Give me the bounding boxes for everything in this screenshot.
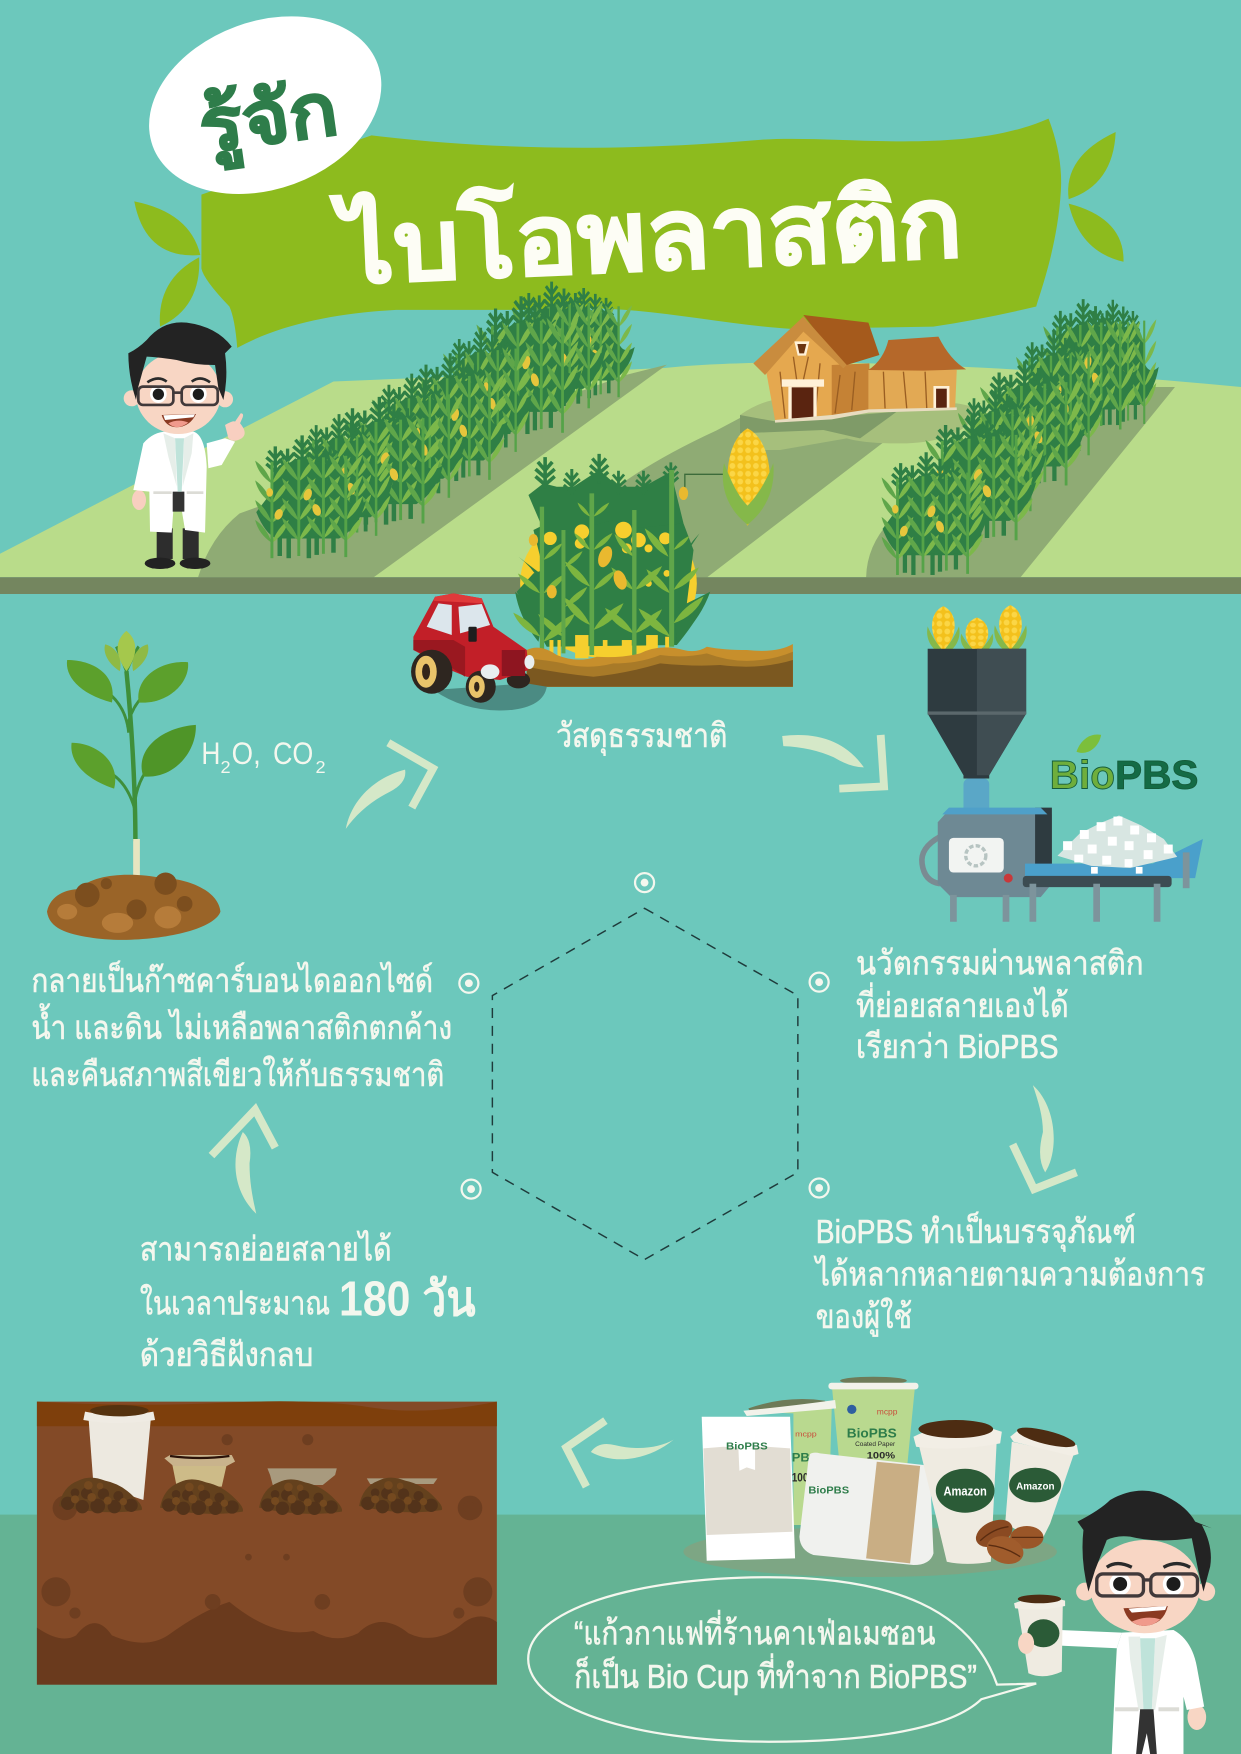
green cup behind bag: mcpp (795, 1430, 817, 1439)
machine (922, 605, 1203, 922)
quote text (574, 1609, 977, 1696)
text: 180 days (140, 1230, 476, 1374)
label: H2O, CO2: H (201, 736, 220, 771)
buried cup: fresh (83, 1405, 155, 1500)
text: innovation: นวัตกรรมผ่านพลาสติก (856, 945, 1144, 982)
front corn (513, 454, 710, 658)
scientist holding cup (1014, 1491, 1215, 1754)
text: end of cycle (31, 960, 452, 1094)
soil strip (527, 644, 793, 687)
text: end of cycle: กลายเป็นก๊าซคาร์บอนไดออกไซด์ (31, 960, 433, 1000)
label: H2O, CO2: 2 (316, 757, 326, 777)
farm field (0, 362, 1241, 594)
title banner side leaves (134, 132, 1124, 327)
paper bag (702, 1417, 795, 1561)
food tray: BioPBS (808, 1485, 849, 1496)
cycle hexagon (492, 908, 798, 1260)
label: natural materials: วัสดุธรรมชาติ (556, 718, 727, 756)
text: 180 days: 180 วัน (339, 1272, 476, 1326)
coffee cup small: Amazon (1016, 1481, 1055, 1492)
text: end of cycle: น้ำ และดิน ไม่เหลือพลาสติกตกค้าง (31, 1003, 452, 1047)
arrow 3 (1013, 1085, 1077, 1189)
buried cup: mostly degraded (267, 1468, 337, 1485)
tall green cup: mcpp (877, 1408, 898, 1417)
quote text: ก็เป็น Bio Cup ที่ทำจาก BioPBS” (574, 1653, 977, 1696)
icon: corn cob with connector (685, 428, 774, 526)
tall green cup: BioPBS (847, 1426, 897, 1440)
logo: BioPBS: BioPBS (1050, 753, 1198, 798)
scientist pointing (124, 322, 245, 569)
product shadow (683, 1526, 1057, 1577)
title banner (201, 119, 1061, 348)
text: packaging: BioPBS ทำเป็นบรรจุภัณฑ์ (816, 1211, 1136, 1252)
tall green cup: 100% (867, 1450, 896, 1460)
text: packaging (813, 1211, 1205, 1337)
coffee beans (972, 1514, 1044, 1569)
text: end of cycle: และคืนสภาพสีเขียวให้กับธรรมชาติ (31, 1055, 444, 1094)
held cup (1014, 1595, 1065, 1676)
heading: รู้จัก: รู้จัก (194, 67, 343, 173)
green cup behind bag: PBS (792, 1451, 818, 1465)
text: 180 days: ด้วยวิธีฝังกลบ (140, 1337, 313, 1374)
plant with soil (47, 631, 220, 940)
paper bag: BioPBS (726, 1441, 768, 1452)
buried cup: nearly gone (367, 1478, 437, 1484)
tractor (411, 593, 547, 710)
label: H2O, CO2 (201, 736, 326, 777)
text: packaging: ของผู้ใช้ (816, 1297, 912, 1337)
tall green cup: Coated Paper (855, 1441, 896, 1448)
label: H2O, CO2: CO (273, 736, 313, 771)
buried cup: partly degraded (164, 1455, 235, 1487)
cycle markers (459, 873, 829, 1199)
arrow 4 (566, 1421, 674, 1487)
corn row right (882, 299, 1159, 575)
soil cross-section (37, 1401, 497, 1685)
speech bubble (528, 1577, 1036, 1742)
heading: ไบโอพลาสติก: ไบโอพลาสติก (329, 165, 964, 304)
text: innovation: ที่ย่อยสลายเองได้ (856, 982, 1069, 1025)
products (683, 1377, 1079, 1577)
green cup behind bag (743, 1399, 836, 1525)
text: innovation (856, 945, 1144, 1066)
arrow 1 (346, 743, 433, 829)
tall green cup (828, 1377, 918, 1470)
label: H2O, CO2: O, (232, 736, 261, 771)
text: 180 days: สามารถย่อยสลายได้ (140, 1230, 392, 1269)
lower ground band (0, 1515, 1241, 1754)
text: 180 days: ในเวลาประมาณ (140, 1283, 330, 1322)
corn row left (255, 282, 635, 558)
label: H2O, CO2: 2 (220, 757, 231, 777)
coffee cup small (1005, 1424, 1079, 1543)
arrow 5 (211, 1110, 275, 1214)
front corn crop and tractor scene (411, 454, 793, 710)
coffee cup large: Amazon (943, 1485, 987, 1499)
arrow 2 (782, 735, 884, 789)
food tray (799, 1453, 933, 1565)
quote text: “แก้วกาแฟที่ร้านคาเฟ่อเมซอน (574, 1609, 936, 1652)
coffee cup large (913, 1420, 1002, 1564)
house (740, 315, 977, 450)
text: innovation: เรียกว่า BioPBS (856, 1029, 1059, 1066)
white blob (124, 0, 406, 225)
compost piles (59, 1478, 442, 1515)
green cup behind bag: 100 (792, 1471, 809, 1485)
